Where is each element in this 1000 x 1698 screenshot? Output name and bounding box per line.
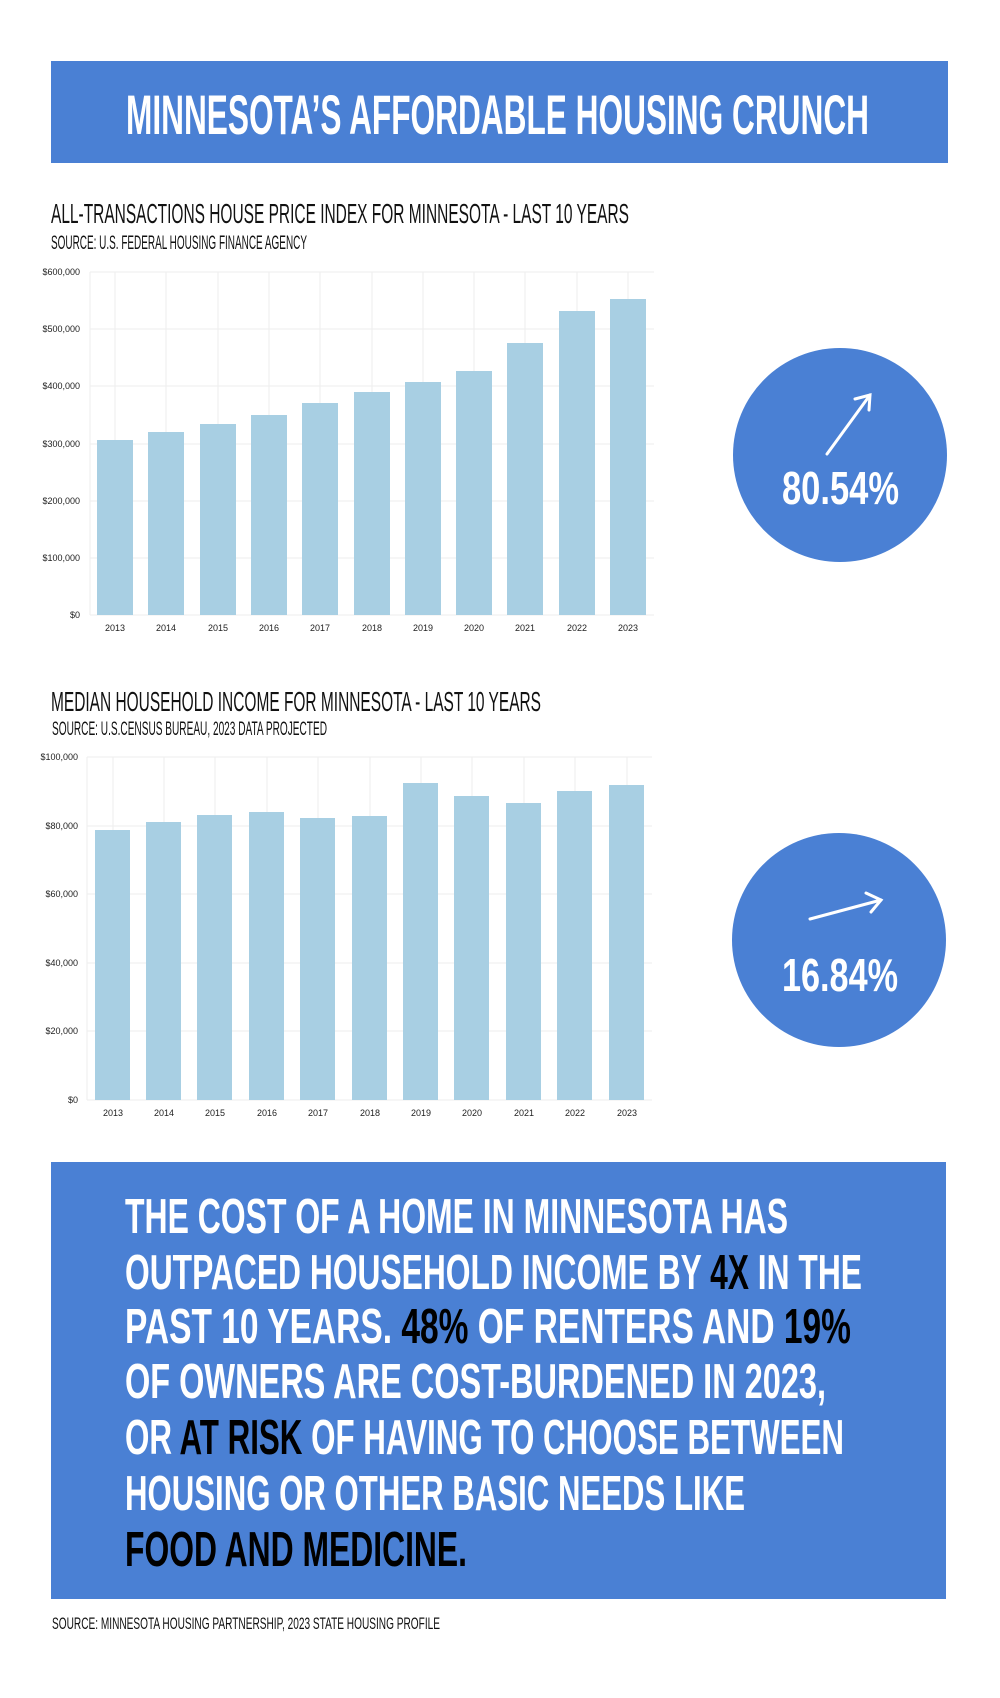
summary panel: PAST 10 YEARS. 48% OF RENTERS AND 19% (125, 1300, 851, 1354)
bar chart: house price index: 2013 (105, 623, 125, 633)
bar chart: house price index: 2017 (310, 623, 330, 633)
bar chart: median household income: 2013 (103, 1108, 123, 1118)
chart 2 heading (51, 686, 541, 740)
callout circle: 80.54% (733, 348, 947, 562)
bar chart: house price index: $500,000 (42, 324, 80, 334)
bar chart: median household income: $100,000 (40, 752, 78, 762)
source 2: SOURCE: U.S.CENSUS BUREAU, 2023 DATA PROJECTED (52, 719, 327, 740)
bar chart: median household income: $80,000 (45, 821, 78, 831)
bar chart: median household income: $40,000 (45, 958, 78, 968)
bar chart: median household income: 2018 (360, 1108, 380, 1118)
chart 1 heading (51, 198, 629, 254)
bar chart: house price index: $400,000 (42, 381, 80, 391)
bar chart: median household income: 2014 (154, 1108, 174, 1118)
bar chart: median household income: 2023 (617, 1108, 637, 1118)
header banner (51, 61, 948, 163)
bar chart: house price index: $200,000 (42, 496, 80, 506)
callout circle: 16.84%: 16.84% (782, 949, 898, 1001)
bar chart: median household income: 2015 (205, 1108, 225, 1118)
footer source: SOURCE: MINNESOTA HOUSING PARTNERSHIP, 2023 STATE HOUSING PROFILE (52, 1614, 440, 1633)
bar chart: house price index: $100,000 (42, 553, 80, 563)
bar chart: house price index: 2021 (515, 623, 535, 633)
bar chart: house price index: 2022 (567, 623, 587, 633)
bar chart: median household income: 2019 (411, 1108, 431, 1118)
bar chart: median household income (40, 752, 652, 1118)
bar chart: median household income: $60,000 (45, 889, 78, 899)
bar chart: house price index: $0 (70, 610, 80, 620)
summary panel: OUTPACED HOUSEHOLD INCOME BY 4X IN THE (125, 1246, 862, 1300)
callout circle: 80.54%: 80.54% (782, 462, 899, 514)
chart 2 heading: MEDIAN HOUSEHOLD INCOME FOR MINNESOTA - LAST 10 YEARS (51, 686, 541, 717)
bar chart: house price index: 2023 (618, 623, 638, 633)
summary panel: FOOD AND MEDICINE. (125, 1523, 467, 1577)
summary panel (51, 1162, 946, 1599)
bar chart: median household income: 2016 (257, 1108, 277, 1118)
bar chart: median household income: 2020 (462, 1108, 482, 1118)
bar chart: median household income: 2017 (308, 1108, 328, 1118)
bar chart: median household income: $20,000 (45, 1026, 78, 1036)
bar chart: house price index: 2019 (413, 623, 433, 633)
source 1: SOURCE: U.S. FEDERAL HOUSING FINANCE AGENCY (51, 233, 307, 254)
bar chart: house price index: 2016 (259, 623, 279, 633)
bar chart: median household income: 2021 (514, 1108, 534, 1118)
bar chart: median household income: 2022 (565, 1108, 585, 1118)
bar chart: house price index: 2015 (208, 623, 228, 633)
bar chart: median household income: $0 (68, 1095, 78, 1105)
icon: up-right arrow (827, 395, 870, 454)
bar chart: house price index: $600,000 (42, 267, 80, 277)
bar chart: house price index: 2014 (156, 623, 176, 633)
icon: right arrow (810, 893, 881, 919)
bar chart: house price index: 2020 (464, 623, 484, 633)
bar chart: house price index: $300,000 (42, 439, 80, 449)
bar chart: house price index: 2018 (362, 623, 382, 633)
bar chart: house price index (42, 267, 654, 633)
callout circle: 16.84% (732, 833, 946, 1047)
